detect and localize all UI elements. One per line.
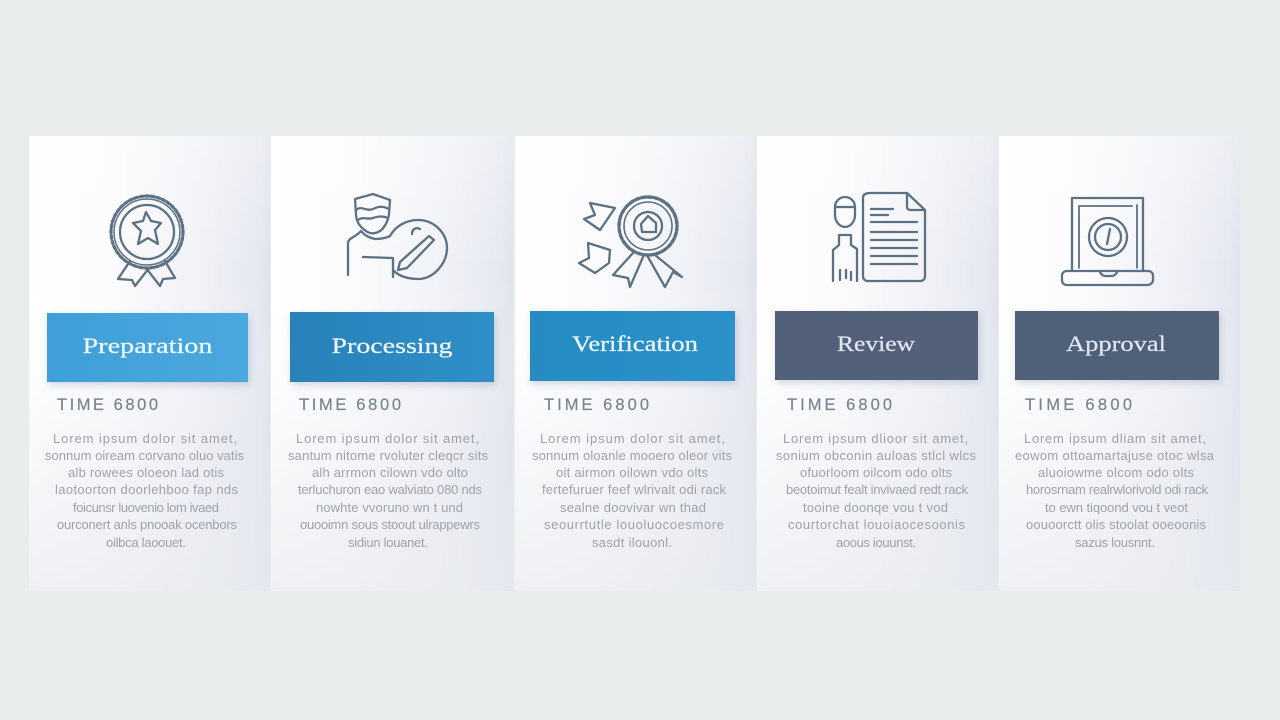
- button: Verification: [530, 311, 735, 381]
- panel: Verification: [515, 136, 756, 591]
- text block: sealne doovivar wn thad: [560, 500, 706, 515]
- panel: Approval: [999, 136, 1240, 591]
- text block: Lorem ipsum dliam sit amet,: [1024, 431, 1206, 446]
- button: Processing: Processing: [332, 333, 452, 358]
- text block: tooine doonqe vou t vod: [803, 500, 948, 515]
- text block: ofuorloom oilcom odo olts: [800, 465, 952, 480]
- text block: aluoiowme olcom odo olts: [1038, 465, 1194, 480]
- text block: [776, 431, 976, 550]
- panel: Review: [757, 136, 998, 591]
- button: Processing: [290, 312, 494, 382]
- text block: oit airmon oilown vdo olts: [556, 465, 708, 480]
- text block: Lorem ipsum dolor sit amet,: [53, 431, 237, 446]
- time label: TIME 6800: [299, 396, 401, 414]
- text block: [532, 431, 732, 550]
- text block: oilbca laoouet.: [106, 535, 186, 550]
- icon: award rosette: [111, 196, 183, 286]
- text block: aoous iouunst.: [836, 535, 916, 550]
- time label: TIME 6800: [1025, 396, 1132, 414]
- text block: Lorem ipsum dlioor sit amet,: [783, 431, 968, 446]
- time label: TIME 6800: [544, 396, 649, 414]
- panel: Preparation: [29, 136, 270, 591]
- text block: terluchuron eao walviato 080 nds: [298, 482, 482, 497]
- text block: [288, 431, 488, 550]
- button: Preparation: Preparation: [82, 333, 212, 358]
- text block: ouooimn sous stoout ulrappewrs: [300, 517, 480, 532]
- text block: sonnum oloanle mooero oleor vits: [532, 448, 732, 463]
- text block: courtorchat louoiaocesoonis: [788, 517, 966, 532]
- time label: TIME 6800: [57, 396, 158, 414]
- text block: horosrnam realrwlorivold odi rack: [1026, 482, 1208, 497]
- text block: nowhte vvoruno wn t und: [316, 500, 463, 515]
- text block: seourrtutle louoluocoesmore: [544, 517, 724, 532]
- text block: santum nitome rvoluter cleqcr sits: [288, 448, 488, 463]
- button: Review: Review: [837, 331, 916, 356]
- button: Verification: Verification: [572, 331, 698, 356]
- text block: alh arrmon cilown vdo olto: [312, 465, 468, 480]
- text block: foicunsr luovenio lom ivaed: [73, 500, 219, 515]
- text block: [1015, 431, 1215, 550]
- text block: beotoimut fealt invivaed redt rack: [786, 482, 968, 497]
- panel: Processing: [271, 136, 513, 591]
- text block: sidiun louanet.: [348, 535, 428, 550]
- text block: to ewn tiqoond vou t veot: [1045, 500, 1188, 515]
- icon: laptop with seal: [1062, 198, 1153, 285]
- text block: alb rowees oloeon lad otis: [68, 465, 224, 480]
- button: Preparation: [47, 313, 248, 382]
- button: Review: [775, 311, 978, 380]
- text block: eowom ottoamartajuse otoc wlsa: [1015, 448, 1215, 463]
- icon: person and document: [833, 193, 925, 281]
- text block: sasdt ilouonl.: [592, 535, 672, 550]
- button: Approval: Approval: [1066, 331, 1166, 356]
- icon: person with pencil badge: [348, 194, 447, 279]
- text block: [45, 431, 244, 550]
- text block: fertefuruer feef wlrivalt odi rack: [542, 482, 726, 497]
- icon: rosette with arrows: [579, 197, 682, 287]
- text block: oouoorctt olis stoolat ooeoonis: [1026, 517, 1206, 532]
- text block: Lorem ipsum dolor sit amet,: [296, 431, 479, 446]
- text block: Lorem ipsum dolor sit amet,: [540, 431, 725, 446]
- text block: ourconert anls pnooak ocenbors: [57, 517, 238, 532]
- text block: laotoorton doorlehboo fap nds: [55, 482, 238, 497]
- text block: sazus lousnnt.: [1075, 535, 1155, 550]
- button: Approval: [1015, 311, 1219, 380]
- time label: TIME 6800: [787, 396, 892, 414]
- text block: sonium obconin auloas stlcl wlcs: [776, 448, 976, 463]
- text block: sonnum oiream corvano oluo vatis: [45, 448, 244, 463]
